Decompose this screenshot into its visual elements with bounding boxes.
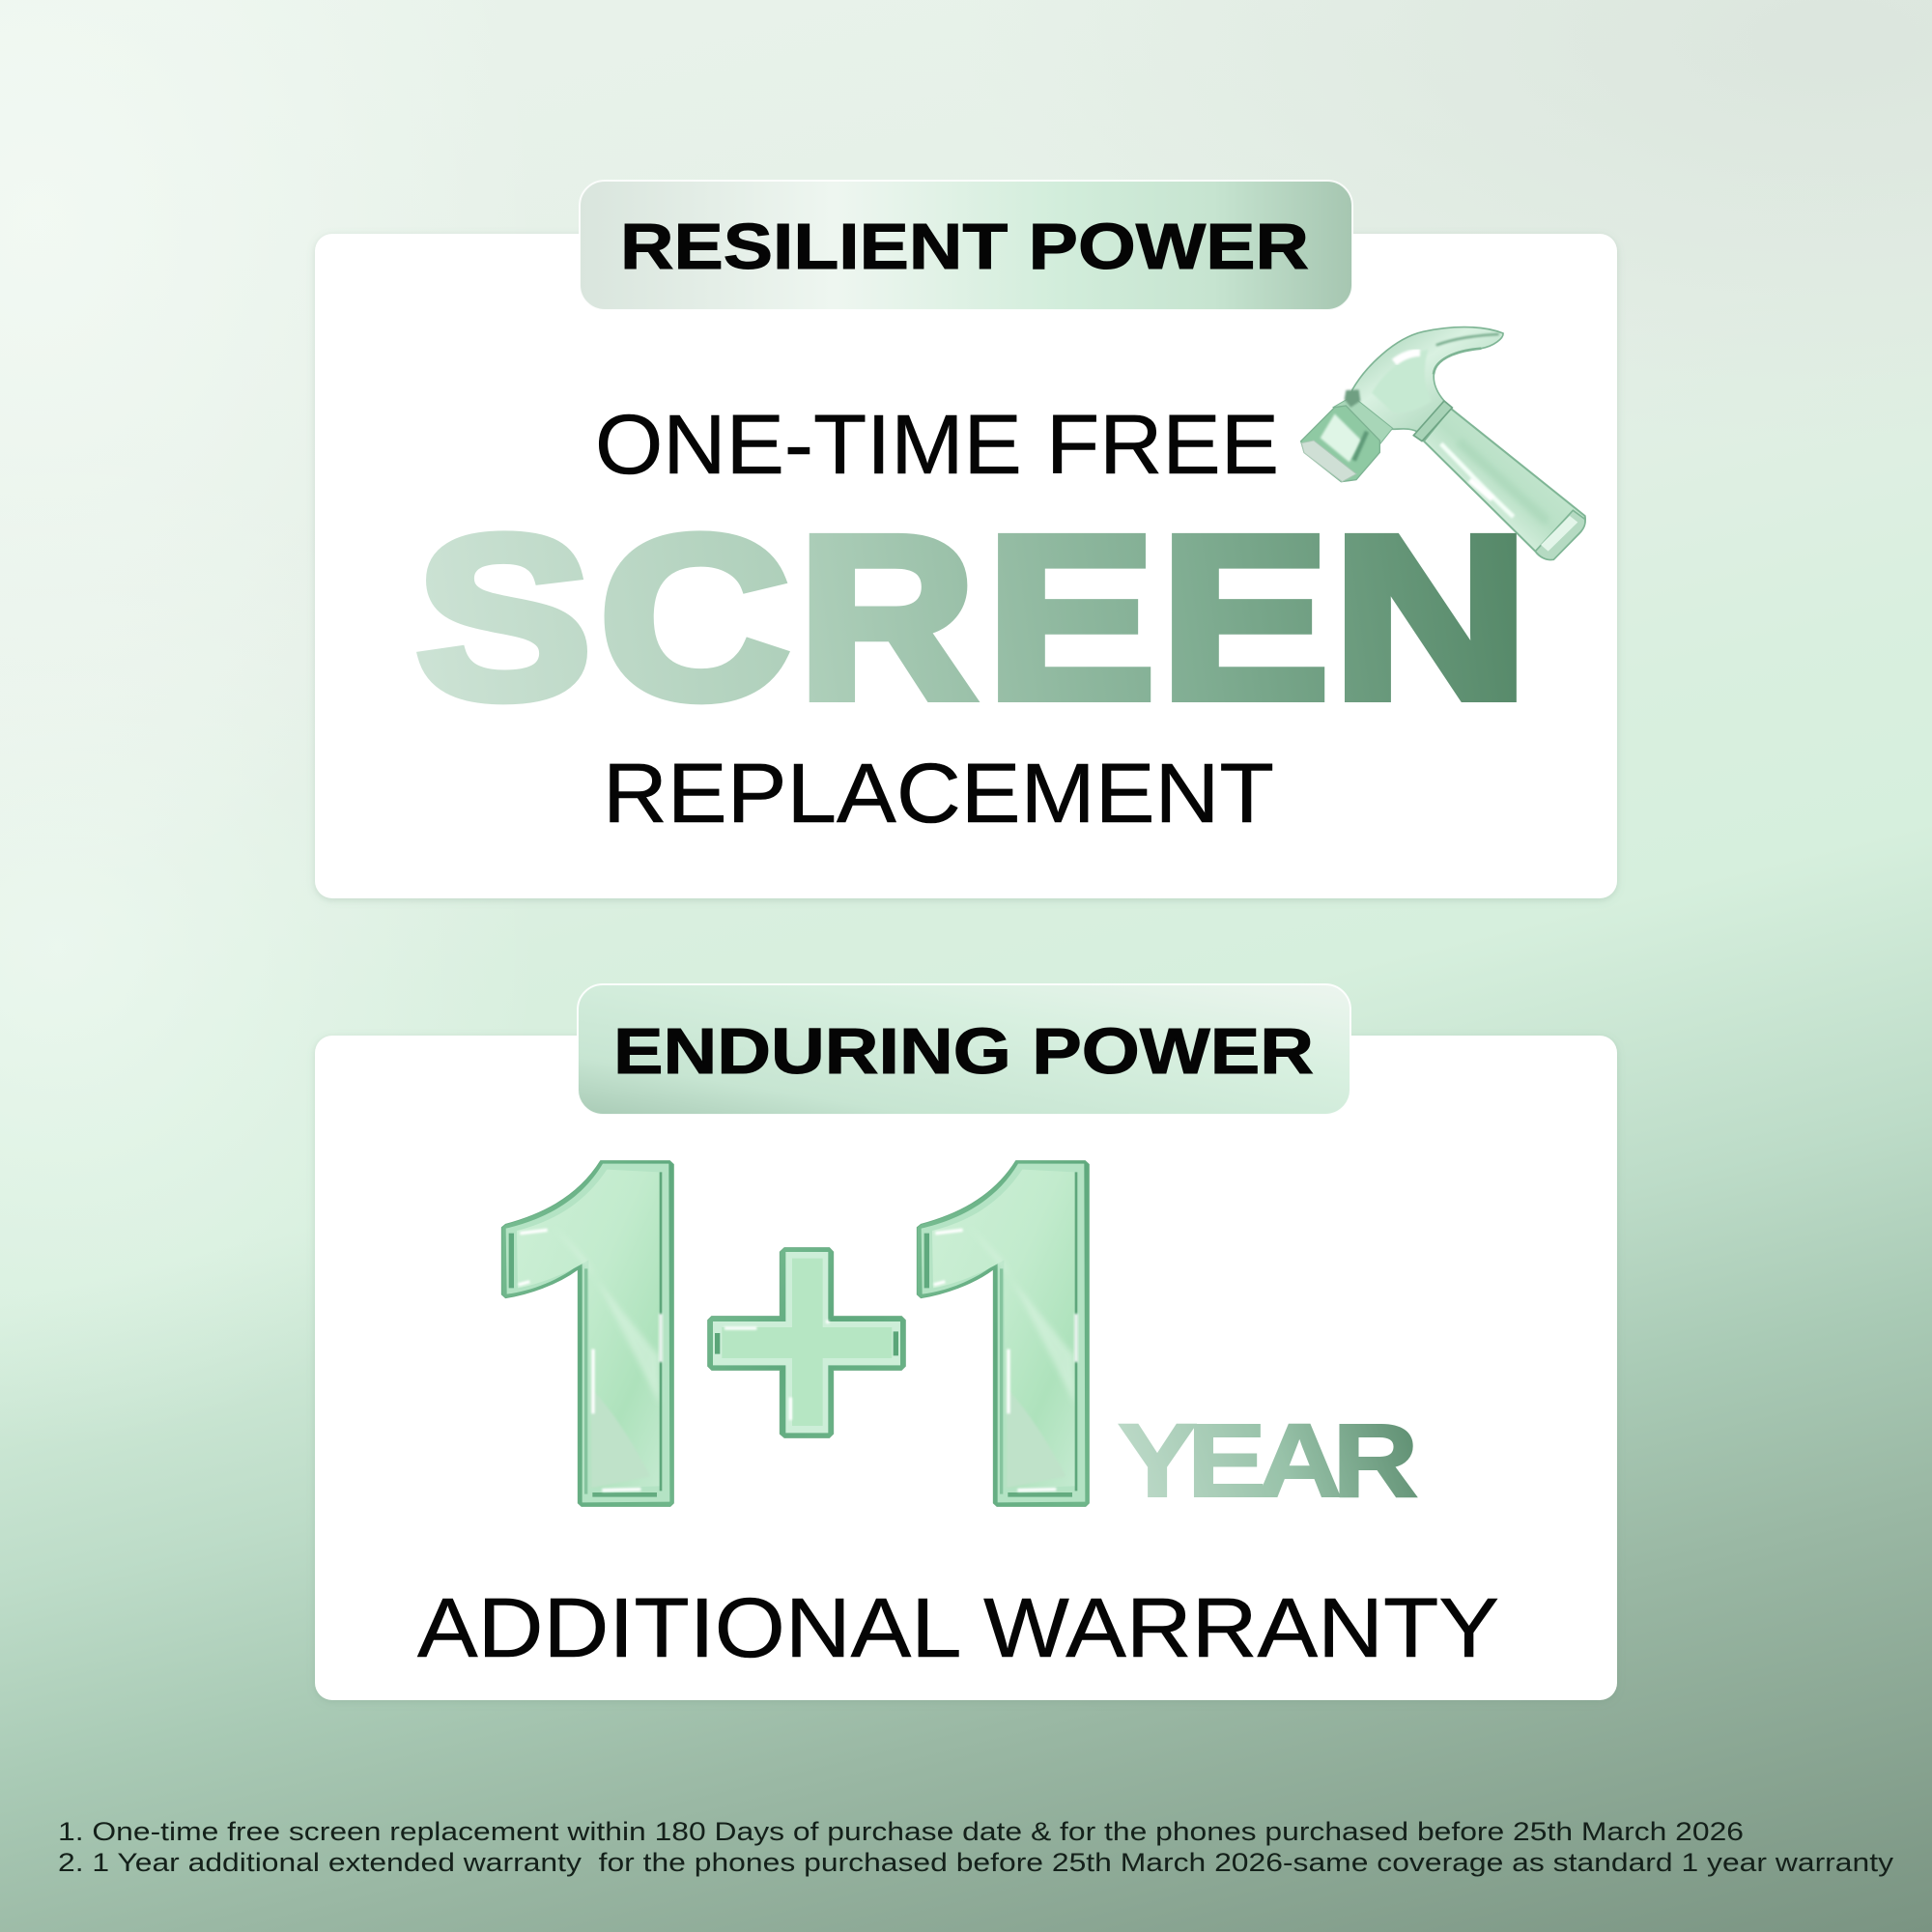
big word: screen: N	[1332, 488, 1529, 747]
footnote 1: 1. One-time free screen replacement within 180 Days of purchase date & for the phones purchased before 25th March 2026	[58, 1817, 1744, 1846]
symbol: glass plus	[708, 1248, 905, 1437]
text: replacement: REPLACEMENT	[603, 747, 1274, 840]
card background: resilient power	[315, 234, 1617, 898]
pill: resilient power	[580, 181, 1352, 310]
panel: resilient power	[315, 181, 1617, 898]
footnotes	[58, 1817, 1894, 1877]
heading: resilient power: RESILIENT POWER	[620, 211, 1309, 283]
panel: enduring power	[315, 984, 1617, 1700]
card background: enduring power	[315, 1036, 1617, 1700]
pill: enduring power	[578, 984, 1350, 1115]
big word: screen: E	[1160, 488, 1329, 747]
big word: screen: R	[798, 488, 976, 747]
text: additional warranty: ADDITIONAL WARRANTY	[417, 1581, 1499, 1675]
big word: screen	[415, 488, 1529, 747]
big word: screen: S	[415, 488, 592, 747]
text: one-time free: ONE-TIME FREE	[595, 398, 1279, 492]
numeral: first glass 1	[501, 1161, 673, 1506]
label: year: YEAR	[1118, 1402, 1417, 1519]
heading: enduring power: ENDURING POWER	[613, 1015, 1314, 1088]
footnote 2: 2. 1 Year additional extended warranty for the phones purchased before 25th March 2026-same coverage as standard 1 year warranty	[58, 1848, 1894, 1877]
big word: screen: E	[986, 488, 1155, 747]
big word: screen: C	[599, 488, 790, 747]
icon: glass hammer	[1301, 327, 1585, 560]
numeral: second glass 1	[917, 1161, 1089, 1506]
